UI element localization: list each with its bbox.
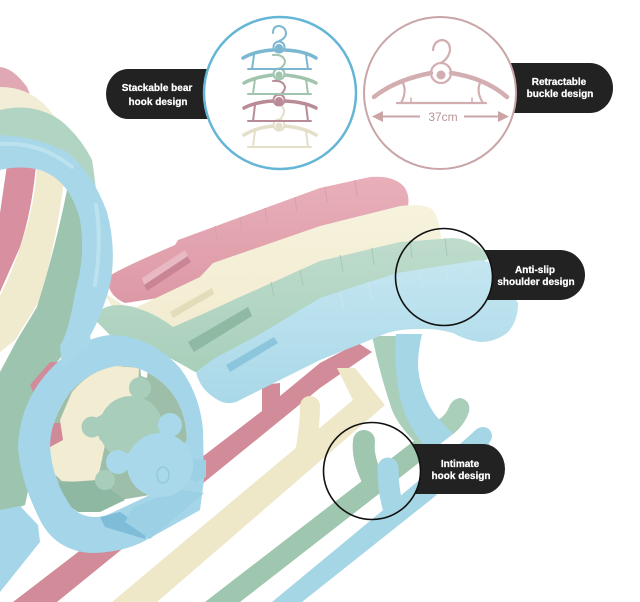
circle	[364, 17, 516, 169]
label: hook design	[129, 97, 187, 108]
callout: intimate hook	[324, 422, 505, 520]
back arches and stems	[0, 67, 96, 515]
blue bear	[100, 413, 206, 539]
white glimpse	[140, 366, 148, 378]
cream arch	[0, 87, 62, 125]
dimension arrow	[372, 111, 509, 122]
blue bar end stub	[474, 427, 492, 445]
cream hanger	[244, 103, 316, 147]
shoulder: blue	[196, 260, 518, 403]
pink glimpse	[30, 362, 58, 398]
shoulder: green	[93, 238, 490, 372]
label: Anti-slip	[515, 265, 555, 276]
dimension text: 37cm	[428, 110, 458, 124]
label: Retractable	[532, 77, 587, 88]
left lower blue piece	[0, 506, 40, 592]
shoulder: pink	[107, 177, 408, 303]
circle	[204, 17, 356, 169]
pill	[106, 69, 215, 119]
cream bar	[112, 368, 385, 602]
green hanger	[244, 55, 316, 94]
pill	[413, 444, 505, 494]
interior base	[50, 366, 187, 508]
ring interior fill	[50, 366, 187, 522]
circle	[324, 422, 420, 520]
label: buckle design	[527, 89, 593, 100]
icon: four stacked hangers	[243, 26, 316, 147]
blue ring	[18, 335, 204, 553]
white gap	[75, 503, 125, 522]
callout: anti-slip shoulder	[396, 228, 585, 326]
green crescent	[55, 480, 125, 512]
green right hook	[372, 336, 469, 452]
hook highlight	[0, 144, 99, 285]
callout: stackable bear hook	[106, 17, 356, 169]
icon: pink hanger with width	[374, 40, 507, 103]
green bear	[82, 377, 163, 490]
photo: stacked hangers	[0, 67, 518, 602]
pink hanger	[244, 81, 316, 121]
label: shoulder design	[497, 277, 575, 288]
green arch	[0, 108, 96, 190]
label: hook design	[432, 471, 490, 482]
green bar	[205, 440, 425, 602]
pill	[505, 63, 613, 113]
pink glimpse	[50, 423, 63, 463]
blue big hook	[0, 135, 113, 368]
circle	[396, 228, 492, 326]
pink bar	[13, 343, 372, 602]
blue bar	[272, 428, 490, 602]
pill	[485, 250, 585, 300]
label: Stackable bear	[122, 83, 192, 94]
blue right hook	[395, 334, 453, 452]
green stem	[0, 190, 85, 515]
callout: retractable buckle	[364, 17, 613, 169]
lower bars and hooks	[13, 334, 492, 602]
cream parts	[50, 366, 139, 483]
label: Intimate	[441, 459, 480, 470]
pink arch	[0, 67, 32, 100]
pink stem	[0, 165, 36, 292]
cream stem	[0, 168, 65, 352]
shoulder: cream	[103, 205, 441, 350]
blue hanger	[243, 26, 316, 69]
